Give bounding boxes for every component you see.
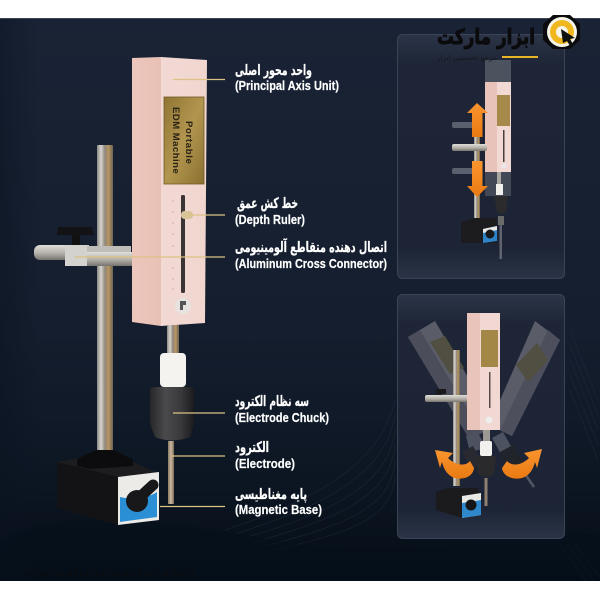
magnetic base	[57, 450, 159, 525]
label: electrode chuck: سه نظام الکترود	[235, 394, 309, 410]
stand with pole and connector	[425, 350, 481, 518]
arrow: rotate left	[435, 450, 474, 479]
website watermark: www.abzarmarket.com	[25, 565, 196, 581]
label: aluminum cross connector: اتصال دهنده متقاطع آلومینیومی	[235, 238, 387, 256]
mini magnetic stand	[452, 122, 497, 243]
label: principal axis unit	[235, 63, 339, 93]
label: aluminum cross connector	[235, 238, 387, 271]
label: aluminum cross connector: (Aluminum Cross Connector)	[235, 256, 387, 271]
arrow: up	[467, 103, 488, 137]
brand seal	[175, 298, 191, 314]
panel: angle adjustment	[398, 294, 564, 538]
label: principal axis unit: (Principal Axis Unit)	[235, 78, 339, 93]
logo tagline: مرجع تخصصی ابزار	[436, 54, 497, 62]
logo wordmark: ابزار مارکت	[437, 25, 535, 49]
nameplate: Portable	[183, 121, 194, 165]
label: electrode	[235, 440, 295, 471]
logo underline	[502, 56, 538, 58]
panel: vertical adjustment	[398, 34, 564, 278]
electrode	[168, 441, 174, 504]
ghost unit tilted right	[489, 321, 560, 487]
label: depth ruler	[235, 196, 305, 227]
label: magnetic base	[235, 487, 322, 517]
spindle and chuck	[150, 325, 194, 504]
upright unit	[467, 313, 500, 506]
label: principal axis unit: واحد محور اصلی	[235, 63, 312, 79]
main unit body	[132, 57, 207, 326]
label: electrode chuck	[235, 394, 329, 425]
logo: abzar market	[436, 15, 580, 62]
label: electrode: الکترود	[235, 440, 269, 456]
nameplate	[164, 97, 204, 184]
leader lines	[75, 80, 225, 506]
label: depth ruler: خط کش عمق	[237, 196, 298, 212]
label: electrode: (Electrode)	[235, 456, 295, 471]
nameplate: EDM Machine	[170, 107, 181, 174]
aluminum cross connector	[34, 227, 132, 266]
arrow: down	[467, 161, 488, 197]
mini device unit	[485, 60, 511, 259]
label: depth ruler: (Depth Ruler)	[235, 212, 305, 227]
ghost unit tilted left	[408, 321, 496, 470]
main stand pole	[97, 145, 113, 451]
label: electrode chuck: (Electrode Chuck)	[235, 410, 329, 425]
logo icon	[543, 15, 580, 49]
depth ruler	[172, 195, 193, 293]
arrow: rotate right	[502, 449, 542, 479]
label: magnetic base: (Magnetic Base)	[235, 502, 322, 517]
label: magnetic base: پایه مغناطیسی	[235, 487, 307, 503]
